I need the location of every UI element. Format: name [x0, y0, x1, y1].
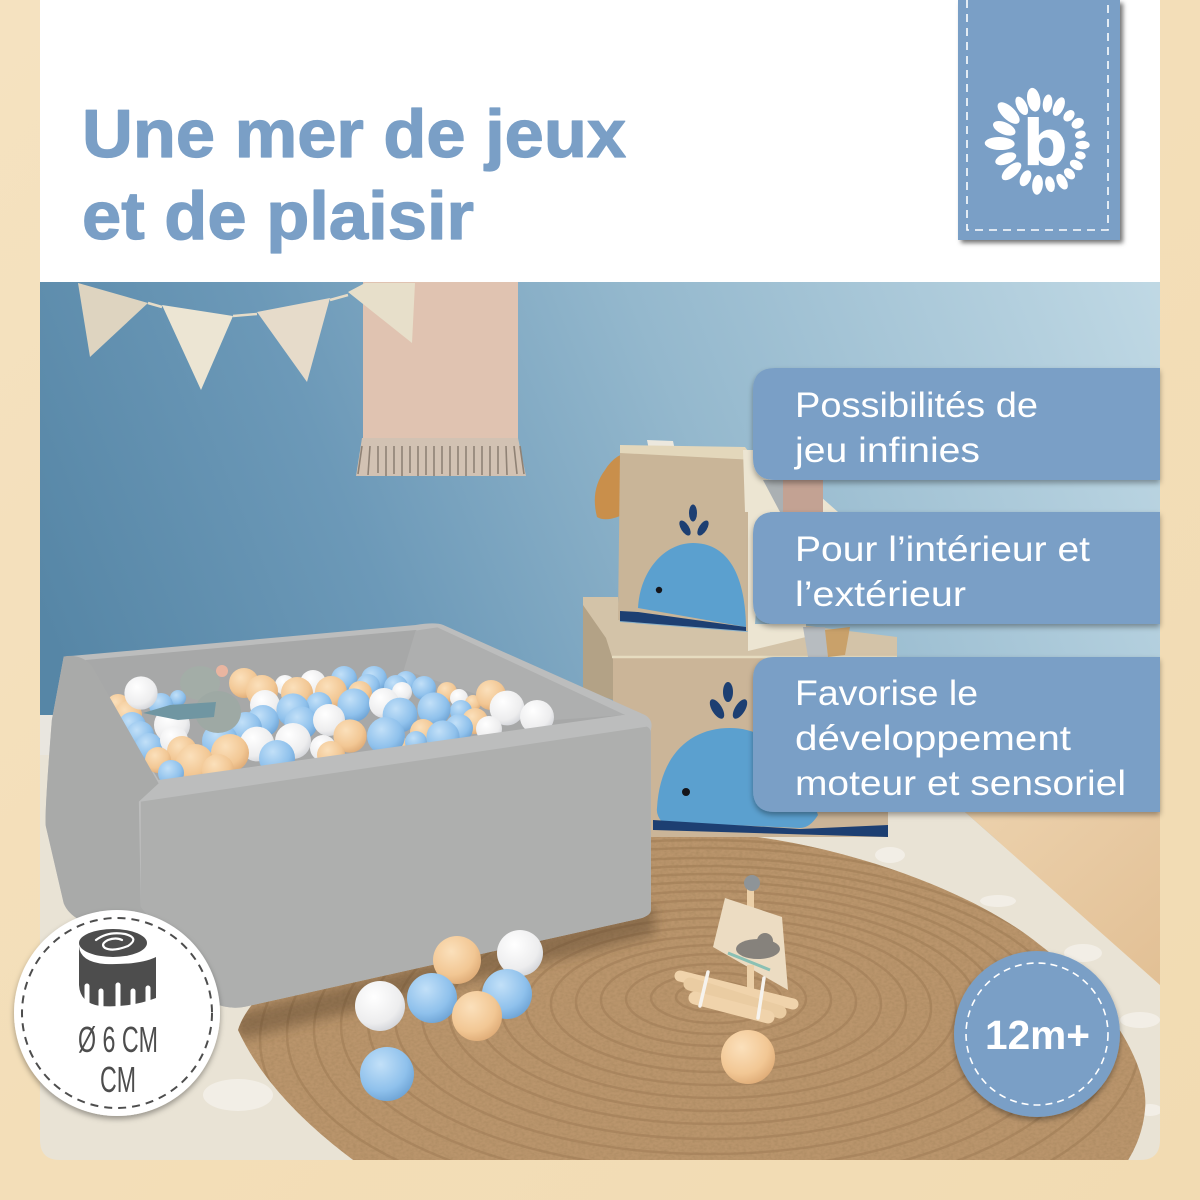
badge: age 12 months and up: 12m+	[985, 1012, 1090, 1058]
icon: whale	[620, 504, 746, 631]
callout: motor and sensory development: développement	[795, 719, 1071, 758]
title	[82, 96, 626, 254]
loose balls	[355, 930, 775, 1101]
icon: tape measure	[79, 929, 156, 1008]
callout: motor and sensory development: moteur et sensoriel	[795, 764, 1126, 803]
logo ribbon	[958, 0, 1120, 240]
wooden toy boat	[680, 875, 793, 1018]
outer shell	[46, 623, 652, 1008]
callout: motor and sensory development: Favorise le	[795, 674, 978, 713]
wall	[40, 282, 1160, 842]
callout: indoor and outdoor: l’extérieur	[795, 575, 966, 614]
top rim	[160, 716, 622, 786]
inner walls	[85, 630, 623, 780]
woven round rug	[238, 837, 1146, 1160]
callout: indoor and outdoor: Pour l’intérieur et	[795, 530, 1090, 569]
callout: indoor and outdoor	[753, 512, 1160, 624]
callout: motor and sensory development	[753, 657, 1160, 812]
badge: ball diameter: CM	[100, 1059, 136, 1100]
badge: age 12 months and up	[954, 951, 1120, 1117]
blanket	[743, 450, 838, 512]
white header panel	[40, 0, 1160, 283]
bunting	[78, 283, 415, 390]
plush toy	[143, 665, 241, 733]
title: et de plaisir	[82, 178, 474, 254]
photo scene	[40, 282, 1162, 1200]
ball pit	[46, 623, 652, 1008]
icon: brand sun logo: b	[1022, 107, 1068, 180]
baseboard	[40, 715, 53, 755]
left side face	[46, 656, 158, 918]
storage box: bottom	[583, 597, 897, 837]
wooden floor	[965, 812, 1160, 985]
icon: brand sun logo	[985, 87, 1090, 195]
carpet tassels	[203, 847, 1162, 1116]
front face	[141, 727, 651, 1008]
orange plush behind box	[594, 455, 620, 520]
cream carpet	[40, 755, 1160, 1160]
storage box: top	[618, 440, 850, 657]
badge: ball diameter	[14, 910, 220, 1116]
title: Une mer de jeux	[82, 96, 626, 172]
callout: endless play: jeu infinies	[794, 431, 980, 470]
callout: endless play	[753, 368, 1160, 480]
balls	[106, 666, 554, 786]
wall tapestry	[356, 282, 526, 476]
icon: whale	[653, 682, 888, 837]
callout: endless play: Possibilités de	[795, 386, 1038, 425]
badge: ball diameter: Ø 6 CM	[78, 1019, 158, 1060]
